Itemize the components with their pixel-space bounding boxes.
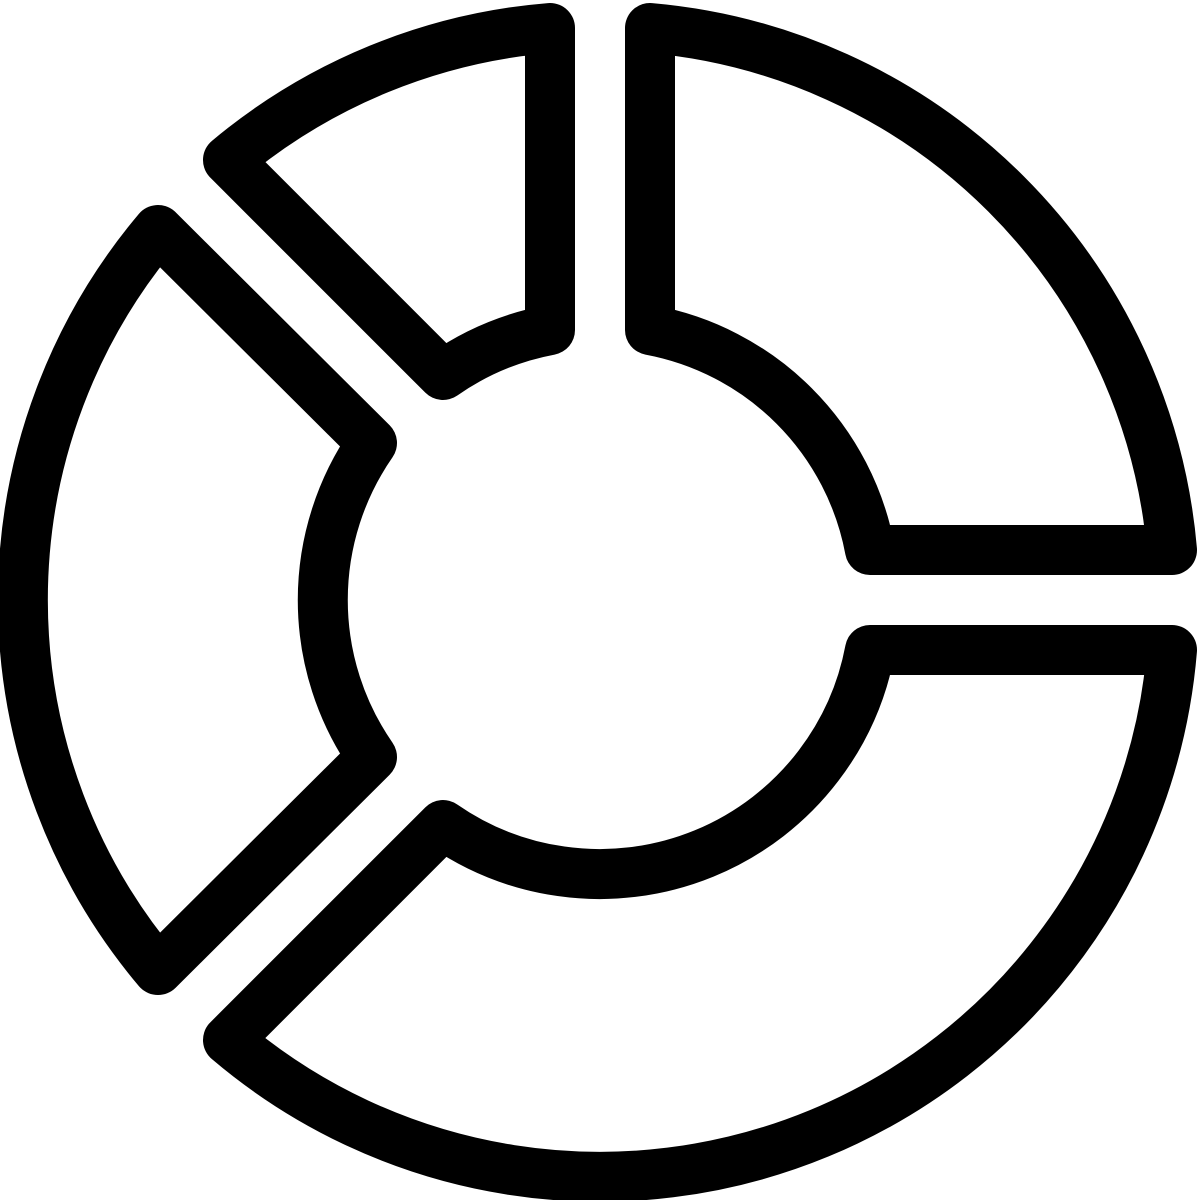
segment: bottom right	[228, 650, 1172, 1177]
segment: top right	[650, 28, 1172, 550]
segment: top left	[228, 28, 550, 375]
segment: left	[23, 230, 372, 970]
